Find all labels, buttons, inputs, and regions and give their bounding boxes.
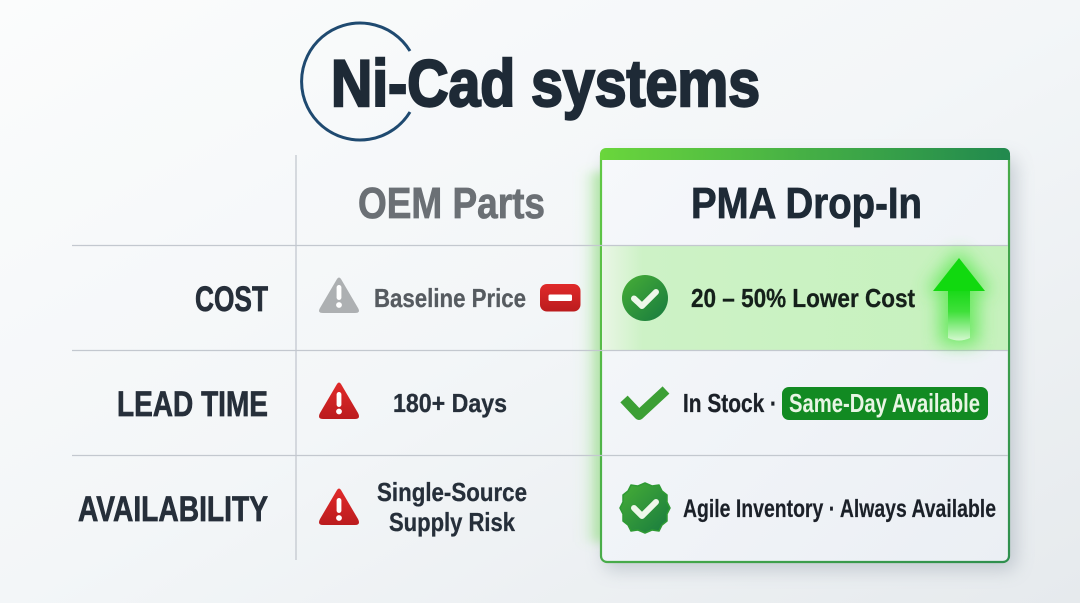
icon: red minus badge bbox=[540, 284, 580, 312]
OEM availability text bbox=[377, 477, 527, 537]
icon: green check mark bbox=[624, 390, 666, 415]
row label: LEAD TIME: LEAD TIME bbox=[117, 385, 268, 424]
panel shadow bbox=[604, 158, 1016, 570]
icon: red warning triangle availability bbox=[319, 488, 359, 525]
same-day pill: Same-Day Available bbox=[789, 388, 980, 418]
OEM availability text: Supply Risk bbox=[389, 507, 515, 537]
cost row highlight bbox=[602, 246, 1008, 350]
OEM cost text: Baseline Price bbox=[374, 283, 526, 313]
OEM availability text: Single-Source bbox=[377, 477, 527, 507]
panel top bar bbox=[600, 148, 1010, 160]
icon: green check circle bbox=[622, 275, 668, 321]
column heading: PMA Drop-In: PMA Drop-In bbox=[691, 179, 922, 228]
panel body bbox=[601, 150, 1009, 562]
icon: grey warning triangle bbox=[319, 278, 359, 313]
icon: green up arrow with glow bbox=[926, 250, 992, 344]
panel: PMA highlight column bbox=[580, 148, 1016, 570]
PMA availability text: Agile Inventory · Always Available bbox=[683, 495, 996, 523]
table grid bbox=[72, 155, 1008, 560]
title logo bbox=[302, 23, 760, 140]
PMA lead time text: In Stock · bbox=[683, 388, 777, 418]
logo ring bbox=[302, 23, 410, 140]
row label: AVAILABILITY: AVAILABILITY bbox=[78, 490, 268, 529]
icon: green seal check bbox=[620, 483, 670, 533]
OEM lead time text: 180+ Days bbox=[393, 388, 507, 418]
icon: red warning triangle lead time bbox=[319, 382, 359, 419]
title text: Ni-Cad systems bbox=[331, 46, 760, 120]
PMA cost text: 20 – 50% Lower Cost bbox=[691, 283, 915, 313]
panel green left glow bbox=[580, 172, 604, 542]
row label: COST: COST bbox=[195, 280, 268, 319]
column heading: OEM Parts: OEM Parts bbox=[358, 179, 545, 228]
